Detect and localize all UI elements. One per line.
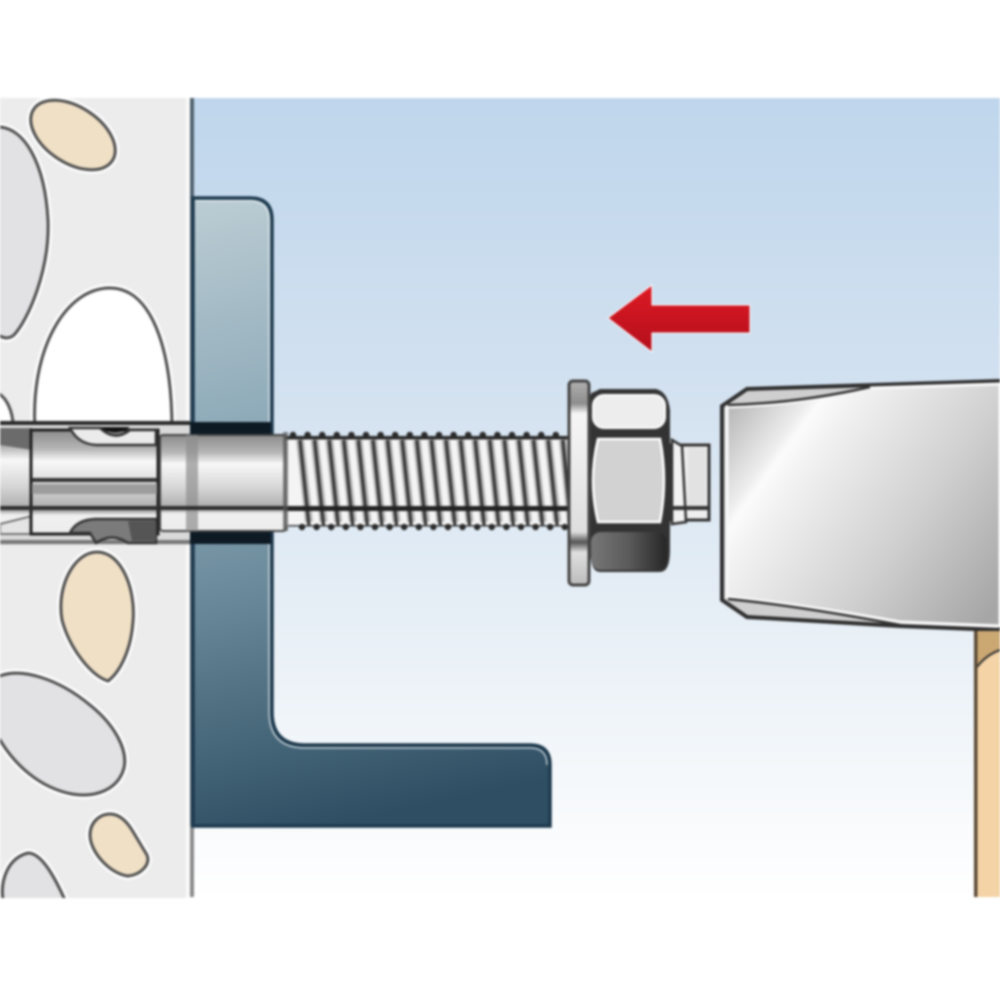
nut: top face (593, 395, 665, 428)
stone: bottom (2, 853, 65, 900)
nut: middle face (593, 439, 664, 522)
bolt cone (0, 428, 32, 534)
sleeve upper slot (70, 428, 156, 445)
threaded bolt section (283, 432, 572, 531)
nut: bottom dark face (591, 532, 667, 570)
clip sleeve (31, 430, 158, 534)
washer (569, 381, 589, 585)
stone: tan middle (61, 552, 133, 681)
hammer handle (974, 631, 1000, 897)
arrow: red, pointing left (608, 285, 750, 352)
background: air gradient (194, 98, 1000, 898)
stone: grey lower (0, 673, 125, 795)
collar (160, 435, 286, 531)
stone: grey tall (0, 127, 48, 338)
stone: small left (0, 392, 13, 430)
hammer head (722, 381, 1000, 630)
bolt end beyond nut (670, 440, 709, 524)
panel: steel angle bracket (193, 198, 550, 826)
hex nut (590, 389, 670, 572)
anchor: sleeve and shank (0, 421, 288, 545)
stone: tan top (28, 97, 118, 173)
stone: white large (35, 288, 172, 430)
stone: tan small (90, 814, 148, 876)
sleeve lower slot (70, 519, 156, 543)
wall edge (190, 98, 194, 897)
hole band in concrete (0, 423, 190, 545)
panel: concrete wall with aggregate stones (0, 86, 190, 900)
hole in bracket: dark gaps (190, 422, 271, 544)
